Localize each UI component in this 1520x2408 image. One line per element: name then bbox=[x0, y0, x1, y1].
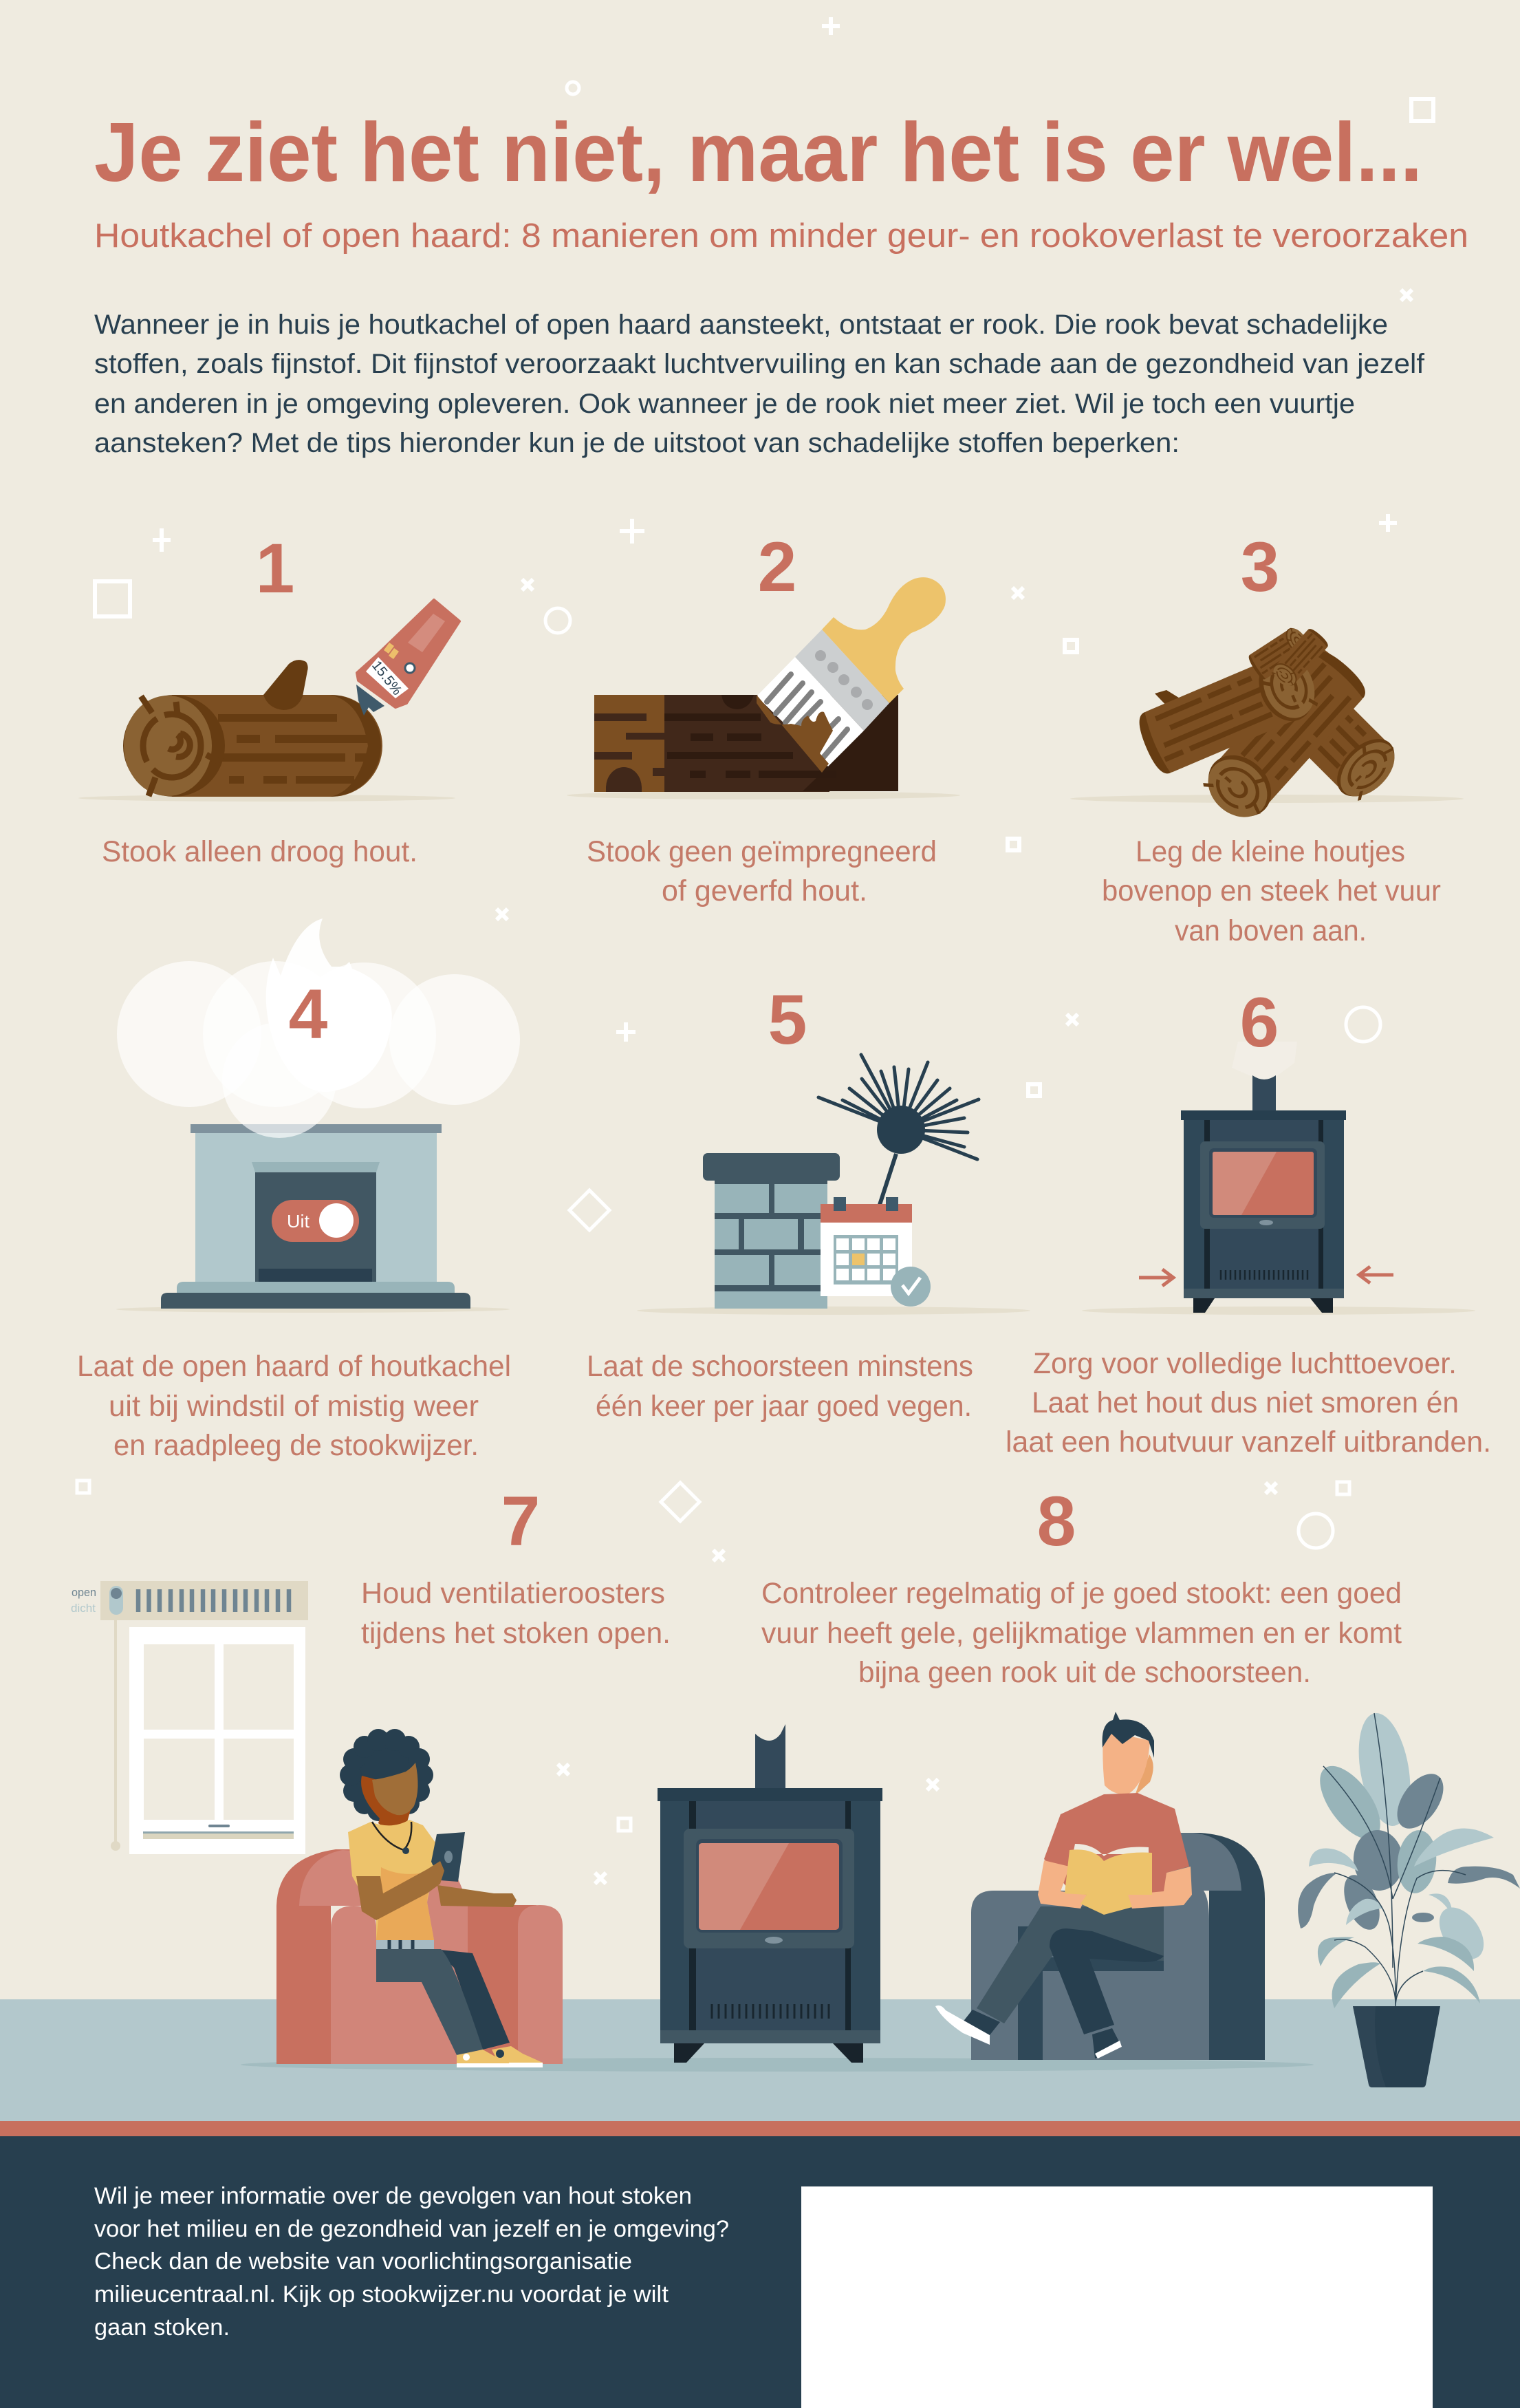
icon: chimney, sweeping brush and calendar bbox=[637, 1055, 1030, 1315]
number 3: 3 bbox=[1241, 528, 1279, 606]
caption 6 bbox=[1006, 1347, 1491, 1459]
white box bbox=[801, 2186, 1433, 2408]
number 2: 2 bbox=[758, 528, 796, 606]
ventilation grille bbox=[71, 1581, 308, 1851]
woman bbox=[340, 1729, 543, 2067]
intro text: aansteken? Met de tips hieronder kun je de uitstoot van schadelijke stoffen beperken: bbox=[94, 428, 1180, 458]
caption 3: Leg de kleine houtjes bbox=[1136, 835, 1405, 868]
number 4: 4 bbox=[289, 975, 328, 1053]
footer text: milieucentraal.nl. Kijk op stookwijzer.nu voordat je wilt bbox=[94, 2281, 669, 2308]
window with ventilation grille bbox=[71, 1581, 308, 1854]
caption 1: Stook alleen droog hout. bbox=[102, 835, 417, 868]
caption 4: uit bij windstil of mistig weer bbox=[109, 1390, 479, 1423]
footer text bbox=[94, 2183, 729, 2341]
intro text: en anderen in je omgeving opleveren. Ook wanneer je de rook niet meer ziet. Wil je toch een vuurtje bbox=[94, 389, 1355, 419]
man bbox=[935, 1712, 1192, 2058]
armchair: blue-grey bbox=[971, 1833, 1265, 2060]
decorative white marks bbox=[77, 17, 1433, 1884]
caption 2: Stook geen geïmpregneerd bbox=[587, 835, 937, 868]
window bbox=[129, 1627, 305, 1854]
icon: stacked logs bbox=[1070, 624, 1464, 830]
pot bbox=[1353, 2006, 1440, 2087]
step 5 bbox=[587, 980, 1030, 1423]
caption 7: tijdens het stoken open. bbox=[361, 1617, 671, 1650]
caption 6: Laat het hout dus niet smoren én bbox=[1032, 1386, 1459, 1419]
caption 5: één keer per jaar goed vegen. bbox=[596, 1390, 972, 1423]
footer text: Check dan de website van voorlichtingsorganisatie bbox=[94, 2248, 632, 2275]
step 1 bbox=[78, 529, 459, 868]
footer text: gaan stoken. bbox=[94, 2314, 230, 2341]
caption 2: of geverfd hout. bbox=[662, 874, 867, 907]
step 6 bbox=[1006, 983, 1491, 1459]
caption 6: laat een houtvuur vanzelf uitbranden. bbox=[1006, 1426, 1491, 1459]
caption 2 bbox=[587, 835, 937, 907]
woman in armchair reading tablet bbox=[276, 1729, 563, 2067]
caption 5 bbox=[587, 1350, 973, 1423]
step 4 bbox=[77, 918, 520, 1462]
number 8: 8 bbox=[1037, 1482, 1076, 1560]
central wood stove bbox=[658, 1724, 882, 2063]
icon: stove with air intake arrows bbox=[1082, 1042, 1475, 1315]
ventilation grille: open bbox=[72, 1586, 96, 1599]
caption 6: Zorg voor volledige luchttoevoer. bbox=[1033, 1347, 1457, 1380]
icon: painted wood with paintbrush bbox=[567, 577, 960, 799]
number 1: 1 bbox=[256, 529, 294, 608]
icon: fireplace with smoke and off-switch bbox=[116, 918, 520, 1313]
intro text: stoffen, zoals fijnstof. Dit fijnstof veroorzaakt luchtvervuiling en kan schade aan de gezondheid van jezelf bbox=[94, 349, 1425, 379]
footer text: voor het milieu en de gezondheid van jezelf en je omgeving? bbox=[94, 2216, 729, 2242]
number 5: 5 bbox=[768, 980, 807, 1059]
caption 7 bbox=[361, 1577, 671, 1650]
subtitle: Houtkachel of open haard: 8 manieren om minder geur- en rookoverlast te veroorzaken bbox=[94, 217, 1468, 255]
caption 3 bbox=[1102, 835, 1441, 947]
icon: log with moisture meter bbox=[78, 600, 459, 802]
step 2 bbox=[567, 528, 960, 907]
footer text: Wil je meer informatie over de gevolgen van hout stoken bbox=[94, 2183, 692, 2209]
caption 4 bbox=[77, 1350, 511, 1462]
caption 5: Laat de schoorsteen minstens bbox=[587, 1350, 973, 1383]
icon: log with moisture meter: 15.5% bbox=[369, 658, 404, 698]
intro text bbox=[94, 310, 1425, 458]
footer panel bbox=[0, 2136, 1520, 2408]
stripe bbox=[0, 2121, 1520, 2136]
stems bbox=[1323, 1713, 1466, 2006]
intro text: Wanneer je in huis je houtkachel of open haard aansteekt, ontstaat er rook. Die rook bevat schadelijke bbox=[94, 310, 1388, 340]
ventilation grille: dicht bbox=[71, 1602, 96, 1615]
number 6: 6 bbox=[1240, 983, 1279, 1062]
icon: fireplace with smoke and off-switch: Uit bbox=[287, 1211, 310, 1232]
step 3 bbox=[1070, 528, 1464, 947]
man in armchair reading book bbox=[935, 1712, 1265, 2060]
caption 8: vuur heeft gele, gelijkmatige vlammen en er komt bbox=[761, 1617, 1402, 1650]
floor bbox=[0, 1999, 1520, 2121]
caption 3: van boven aan. bbox=[1175, 914, 1367, 947]
plant in pot bbox=[1298, 1709, 1520, 2087]
caption 8 bbox=[761, 1577, 1402, 1689]
caption 4: Laat de open haard of houtkachel bbox=[77, 1350, 511, 1383]
number 7: 7 bbox=[501, 1482, 540, 1560]
caption 3: bovenop en steek het vuur bbox=[1102, 874, 1441, 907]
armchair: red bbox=[276, 1849, 563, 2064]
floor shadow bbox=[241, 2058, 1314, 2072]
title: Je ziet het niet, maar het is er wel... bbox=[94, 105, 1422, 199]
caption 8: Controleer regelmatig of je goed stookt: een goed bbox=[761, 1577, 1402, 1610]
caption 7: Houd ventilatieroosters bbox=[361, 1577, 665, 1610]
leaves bbox=[1298, 1709, 1520, 2008]
caption 4: en raadpleeg de stookwijzer. bbox=[113, 1429, 479, 1462]
caption 8: bijna geen rook uit de schoorsteen. bbox=[858, 1656, 1311, 1689]
